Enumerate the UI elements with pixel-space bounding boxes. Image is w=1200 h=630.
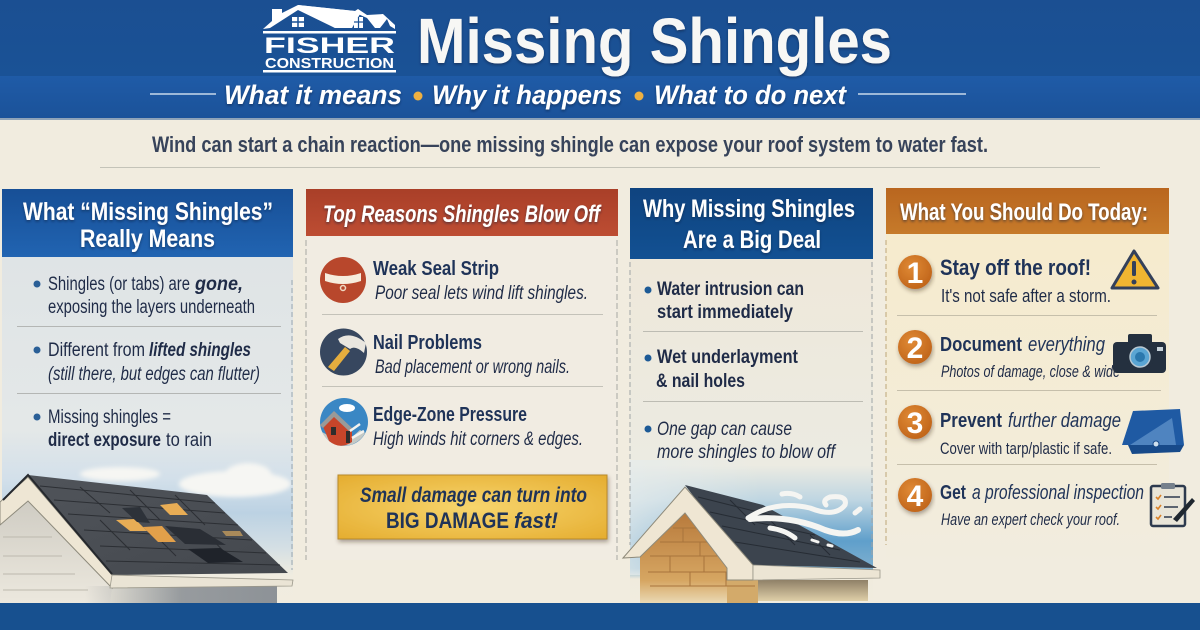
reason: weak seal strip: Weak Seal Strip bbox=[373, 258, 499, 280]
icon: edge-zone house bbox=[320, 398, 368, 446]
panel 3 heading bbox=[630, 188, 873, 259]
reason: nail problems: Bad placement or wrong nails. bbox=[375, 357, 570, 378]
step 1 bbox=[898, 255, 1111, 306]
reason: edge-zone pressure: High winds hit corners & edges. bbox=[373, 429, 583, 450]
bullet: shingles gone bbox=[34, 274, 255, 318]
intro sentence: Wind can start a chain reaction—one missing shingle can expose your roof system to water fast. bbox=[152, 132, 988, 157]
bullet: shingles gone: gone, bbox=[194, 274, 243, 295]
logo: Fisher Construction: FISHER bbox=[264, 33, 395, 58]
bullet: shingles gone: Shingles (or tabs) are bbox=[48, 274, 190, 295]
panel 2 heading: Top Reasons Shingles Blow Off bbox=[323, 201, 602, 228]
panel 1 heading bbox=[2, 189, 293, 257]
bullet: one gap bbox=[644, 419, 836, 463]
panel 2 body bbox=[306, 236, 618, 560]
subtitle row bbox=[150, 80, 966, 110]
bullet: water intrusion: Water intrusion can bbox=[657, 279, 804, 300]
step 2 bbox=[898, 330, 1120, 381]
illustration: roof with wind bbox=[623, 485, 880, 603]
callout: big damage: BIG DAMAGE bbox=[386, 508, 509, 533]
step 4: Get bbox=[940, 482, 966, 504]
bullet: wet underlayment: & nail holes bbox=[656, 371, 745, 392]
step 1: It's not safe after a storm. bbox=[941, 286, 1111, 306]
step 2: Document bbox=[940, 334, 1022, 356]
subtitle row: What to do next bbox=[654, 80, 847, 110]
reason: edge-zone pressure bbox=[373, 404, 583, 450]
icon: hammer bbox=[320, 328, 367, 376]
step 2: 2 bbox=[907, 332, 923, 365]
bullet: water intrusion: start immediately bbox=[657, 302, 793, 323]
bullet: wet underlayment bbox=[644, 347, 799, 392]
title: Missing Shingles bbox=[417, 5, 892, 77]
bullet: different from lifted bbox=[34, 340, 260, 385]
bullet: direct exposure bbox=[34, 407, 212, 451]
bullet: direct exposure: to rain bbox=[166, 430, 212, 451]
step 4 bbox=[898, 478, 1144, 529]
icon: camera bbox=[1113, 334, 1166, 373]
reason: weak seal strip bbox=[373, 258, 588, 304]
bullet: different from lifted: (still there, but edges can flutter) bbox=[48, 364, 260, 385]
icon: tarp bbox=[1122, 409, 1184, 454]
bullet: shingles gone: exposing the layers underneath bbox=[48, 297, 255, 318]
reason: nail problems: Nail Problems bbox=[373, 332, 482, 354]
step 4: Have an expert check your roof. bbox=[941, 510, 1120, 529]
panel 1 dashed edge bbox=[291, 280, 293, 570]
clouds bbox=[80, 463, 291, 497]
subtitle row: Why it happens bbox=[432, 80, 622, 110]
header band bbox=[0, 0, 1200, 120]
panel 4 heading bbox=[886, 188, 1169, 234]
panel 4 body bbox=[886, 234, 1169, 564]
step 3: Cover with tarp/plastic if safe. bbox=[940, 439, 1112, 458]
callout: big damage: fast! bbox=[514, 508, 558, 533]
bullet: wet underlayment: Wet underlayment bbox=[657, 347, 799, 368]
panel: what you should do today bbox=[886, 188, 1195, 564]
reason: nail problems bbox=[373, 332, 570, 378]
illustration: damaged roof bbox=[0, 475, 293, 603]
step 1: 1 bbox=[907, 257, 923, 290]
bullet: one gap: One gap can cause bbox=[657, 419, 792, 440]
reason: edge-zone pressure: Edge-Zone Pressure bbox=[373, 404, 527, 426]
step 2: Photos of damage, close & wide bbox=[941, 362, 1120, 381]
panel 1 heading: Really Means bbox=[80, 225, 215, 253]
callout: big damage bbox=[338, 475, 607, 539]
panel: what missing shingles really means bbox=[0, 189, 293, 603]
logo: Fisher Construction bbox=[263, 5, 396, 72]
panel: why missing shingles are a big deal bbox=[623, 188, 880, 603]
step 3 bbox=[898, 405, 1121, 458]
bullet: different from lifted: lifted shingles bbox=[149, 340, 251, 361]
step 3: Prevent bbox=[940, 410, 1002, 432]
logo: Fisher Construction: CONSTRUCTION bbox=[265, 55, 394, 72]
bullet: direct exposure: Missing shingles = bbox=[48, 407, 171, 428]
subtitle row: What it means bbox=[224, 80, 402, 110]
step 3: further damage bbox=[1008, 410, 1121, 432]
icon: weak seal strip bbox=[320, 257, 366, 303]
panel: top reasons shingles blow off bbox=[306, 189, 618, 560]
panel 3 body bbox=[630, 259, 873, 603]
callout: big damage: Small damage can turn into bbox=[360, 484, 587, 507]
step 4: 4 bbox=[907, 480, 924, 513]
panel 1 heading: What “Missing Shingles” bbox=[23, 198, 273, 226]
icon: warning triangle bbox=[1112, 251, 1158, 288]
icon: wind swirls bbox=[748, 493, 860, 546]
bullet: different from lifted: Different from bbox=[48, 340, 145, 361]
step 2: everything bbox=[1028, 334, 1105, 356]
reason: weak seal strip: Poor seal lets wind lift shingles. bbox=[375, 283, 588, 304]
bullet: one gap: more shingles to blow off bbox=[657, 442, 836, 463]
footer band bbox=[0, 603, 1200, 630]
bullet: direct exposure: direct exposure bbox=[48, 430, 161, 451]
panel 3 heading: Are a Big Deal bbox=[683, 226, 821, 254]
panel 1 body bbox=[2, 257, 293, 603]
step 3: 3 bbox=[907, 407, 923, 440]
panel 2 heading bbox=[306, 189, 618, 236]
step 1: Stay off the roof! bbox=[940, 255, 1091, 280]
step 4: a professional inspection bbox=[972, 482, 1144, 504]
icon: clipboard bbox=[1151, 483, 1195, 526]
panel 3 heading: Why Missing Shingles bbox=[643, 195, 855, 223]
bullet: water intrusion bbox=[644, 279, 804, 323]
